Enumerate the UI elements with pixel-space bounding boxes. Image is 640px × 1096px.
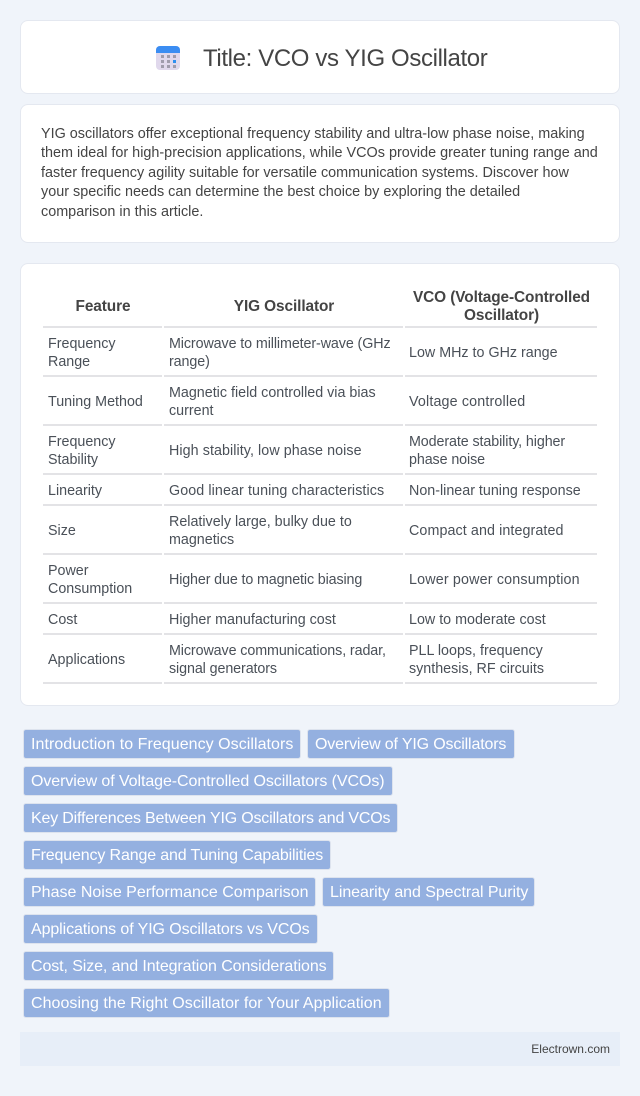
tag <box>23 840 331 870</box>
tag <box>307 729 515 759</box>
row: power consumption: Higher due to magnetic biasing <box>169 572 362 588</box>
intro paragraph: comparison in this article. <box>41 204 203 220</box>
table header <box>76 289 590 324</box>
tag: Phase Noise Performance Comparison <box>31 884 308 901</box>
comparison table panel <box>20 263 620 706</box>
row: cost: Higher manufacturing cost <box>169 612 336 628</box>
row: tuning method <box>48 385 525 419</box>
tag: Linearity and Spectral Purity <box>330 884 528 901</box>
row: linearity <box>48 483 581 499</box>
row: size: magnetics <box>169 532 234 548</box>
row: frequency range: Low MHz to GHz range <box>409 345 558 361</box>
header card <box>20 20 620 94</box>
row: power consumption: Lower power consumption <box>409 572 580 588</box>
intro paragraph: them ideal for high-precision applications, while VCOs provide greater tuning range and <box>41 145 598 161</box>
title: Title: VCO vs YIG Oscillator <box>203 45 487 72</box>
table header: VCO (Voltage-Controlled <box>413 289 590 306</box>
row: linearity: Non-linear tuning response <box>409 483 581 499</box>
row: frequency stability: phase noise <box>409 452 485 468</box>
table header: Oscillator) <box>464 307 539 324</box>
intro paragraph <box>41 126 598 220</box>
table header: YIG Oscillator <box>234 298 334 315</box>
row: applications: Applications <box>48 652 125 668</box>
row: applications: Microwave communications, radar, <box>169 643 386 659</box>
row: frequency stability <box>48 434 565 468</box>
tag: Overview of YIG Oscillators <box>315 736 506 753</box>
row: frequency stability: Moderate stability, higher <box>409 434 565 450</box>
table header: Feature <box>76 298 130 315</box>
footer <box>20 1032 620 1066</box>
row: tuning method: Magnetic field controlled via bias <box>169 385 376 401</box>
row: frequency stability: Stability <box>48 452 98 468</box>
tag <box>322 877 535 907</box>
row: applications: PLL loops, frequency <box>409 643 543 659</box>
row: linearity: Linearity <box>48 483 102 499</box>
row: applications: signal generators <box>169 661 277 677</box>
tag <box>23 766 393 796</box>
row: tuning method: Voltage controlled <box>409 394 525 410</box>
tag: Cost, Size, and Integration Considerations <box>31 958 327 975</box>
row: tuning method: current <box>169 403 214 419</box>
tag <box>23 951 334 981</box>
row: cost: Cost <box>48 612 77 628</box>
row: frequency range: Microwave to millimeter-wave (GHz <box>169 336 391 352</box>
row: cost <box>48 612 546 628</box>
row: size: Compact and integrated <box>409 523 564 539</box>
row: size <box>48 514 564 548</box>
tag: Key Differences Between YIG Oscillators and VCOs <box>31 810 390 827</box>
row: cost: Low to moderate cost <box>409 612 546 628</box>
row: size: Size <box>48 523 76 539</box>
tag <box>23 729 301 759</box>
tag <box>23 803 398 833</box>
tag <box>23 877 316 907</box>
row: applications: synthesis, RF circuits <box>409 661 544 677</box>
intro paragraph: your specific needs can determine the best choice by exploring the detailed <box>41 184 520 200</box>
intro text panel <box>20 104 620 243</box>
tag <box>23 988 390 1018</box>
row: frequency range: Frequency <box>48 336 116 352</box>
row: linearity: Good linear tuning characteristics <box>169 483 384 499</box>
row: frequency range <box>48 336 558 370</box>
tag: Choosing the Right Oscillator for Your Application <box>31 995 382 1012</box>
row: frequency stability: Frequency <box>48 434 116 450</box>
tag: Overview of Voltage-Controlled Oscillators (VCOs) <box>31 773 385 790</box>
row: power consumption: Power <box>48 563 89 579</box>
row: power consumption: Consumption <box>48 581 132 597</box>
tag: Applications of YIG Oscillators vs VCOs <box>31 921 310 938</box>
tag: Introduction to Frequency Oscillators <box>31 736 293 753</box>
icon: calendar <box>156 46 180 70</box>
intro paragraph: faster frequency agility suitable for versatile communication systems. Discover how <box>41 165 569 181</box>
row: size: Relatively large, bulky due to <box>169 514 352 530</box>
row: frequency stability: High stability, low phase noise <box>169 443 362 459</box>
row: applications <box>48 643 544 677</box>
row: power consumption <box>48 563 580 597</box>
tag <box>23 914 318 944</box>
footer credit: Electrown.com <box>531 1042 610 1056</box>
row: frequency range: Range <box>48 354 90 370</box>
row: frequency range: range) <box>169 354 210 370</box>
intro paragraph: YIG oscillators offer exceptional frequency stability and ultra-low phase noise, making <box>41 126 585 142</box>
topic tags <box>23 729 535 1018</box>
row: tuning method: Tuning Method <box>48 394 143 410</box>
tag: Frequency Range and Tuning Capabilities <box>31 847 323 864</box>
